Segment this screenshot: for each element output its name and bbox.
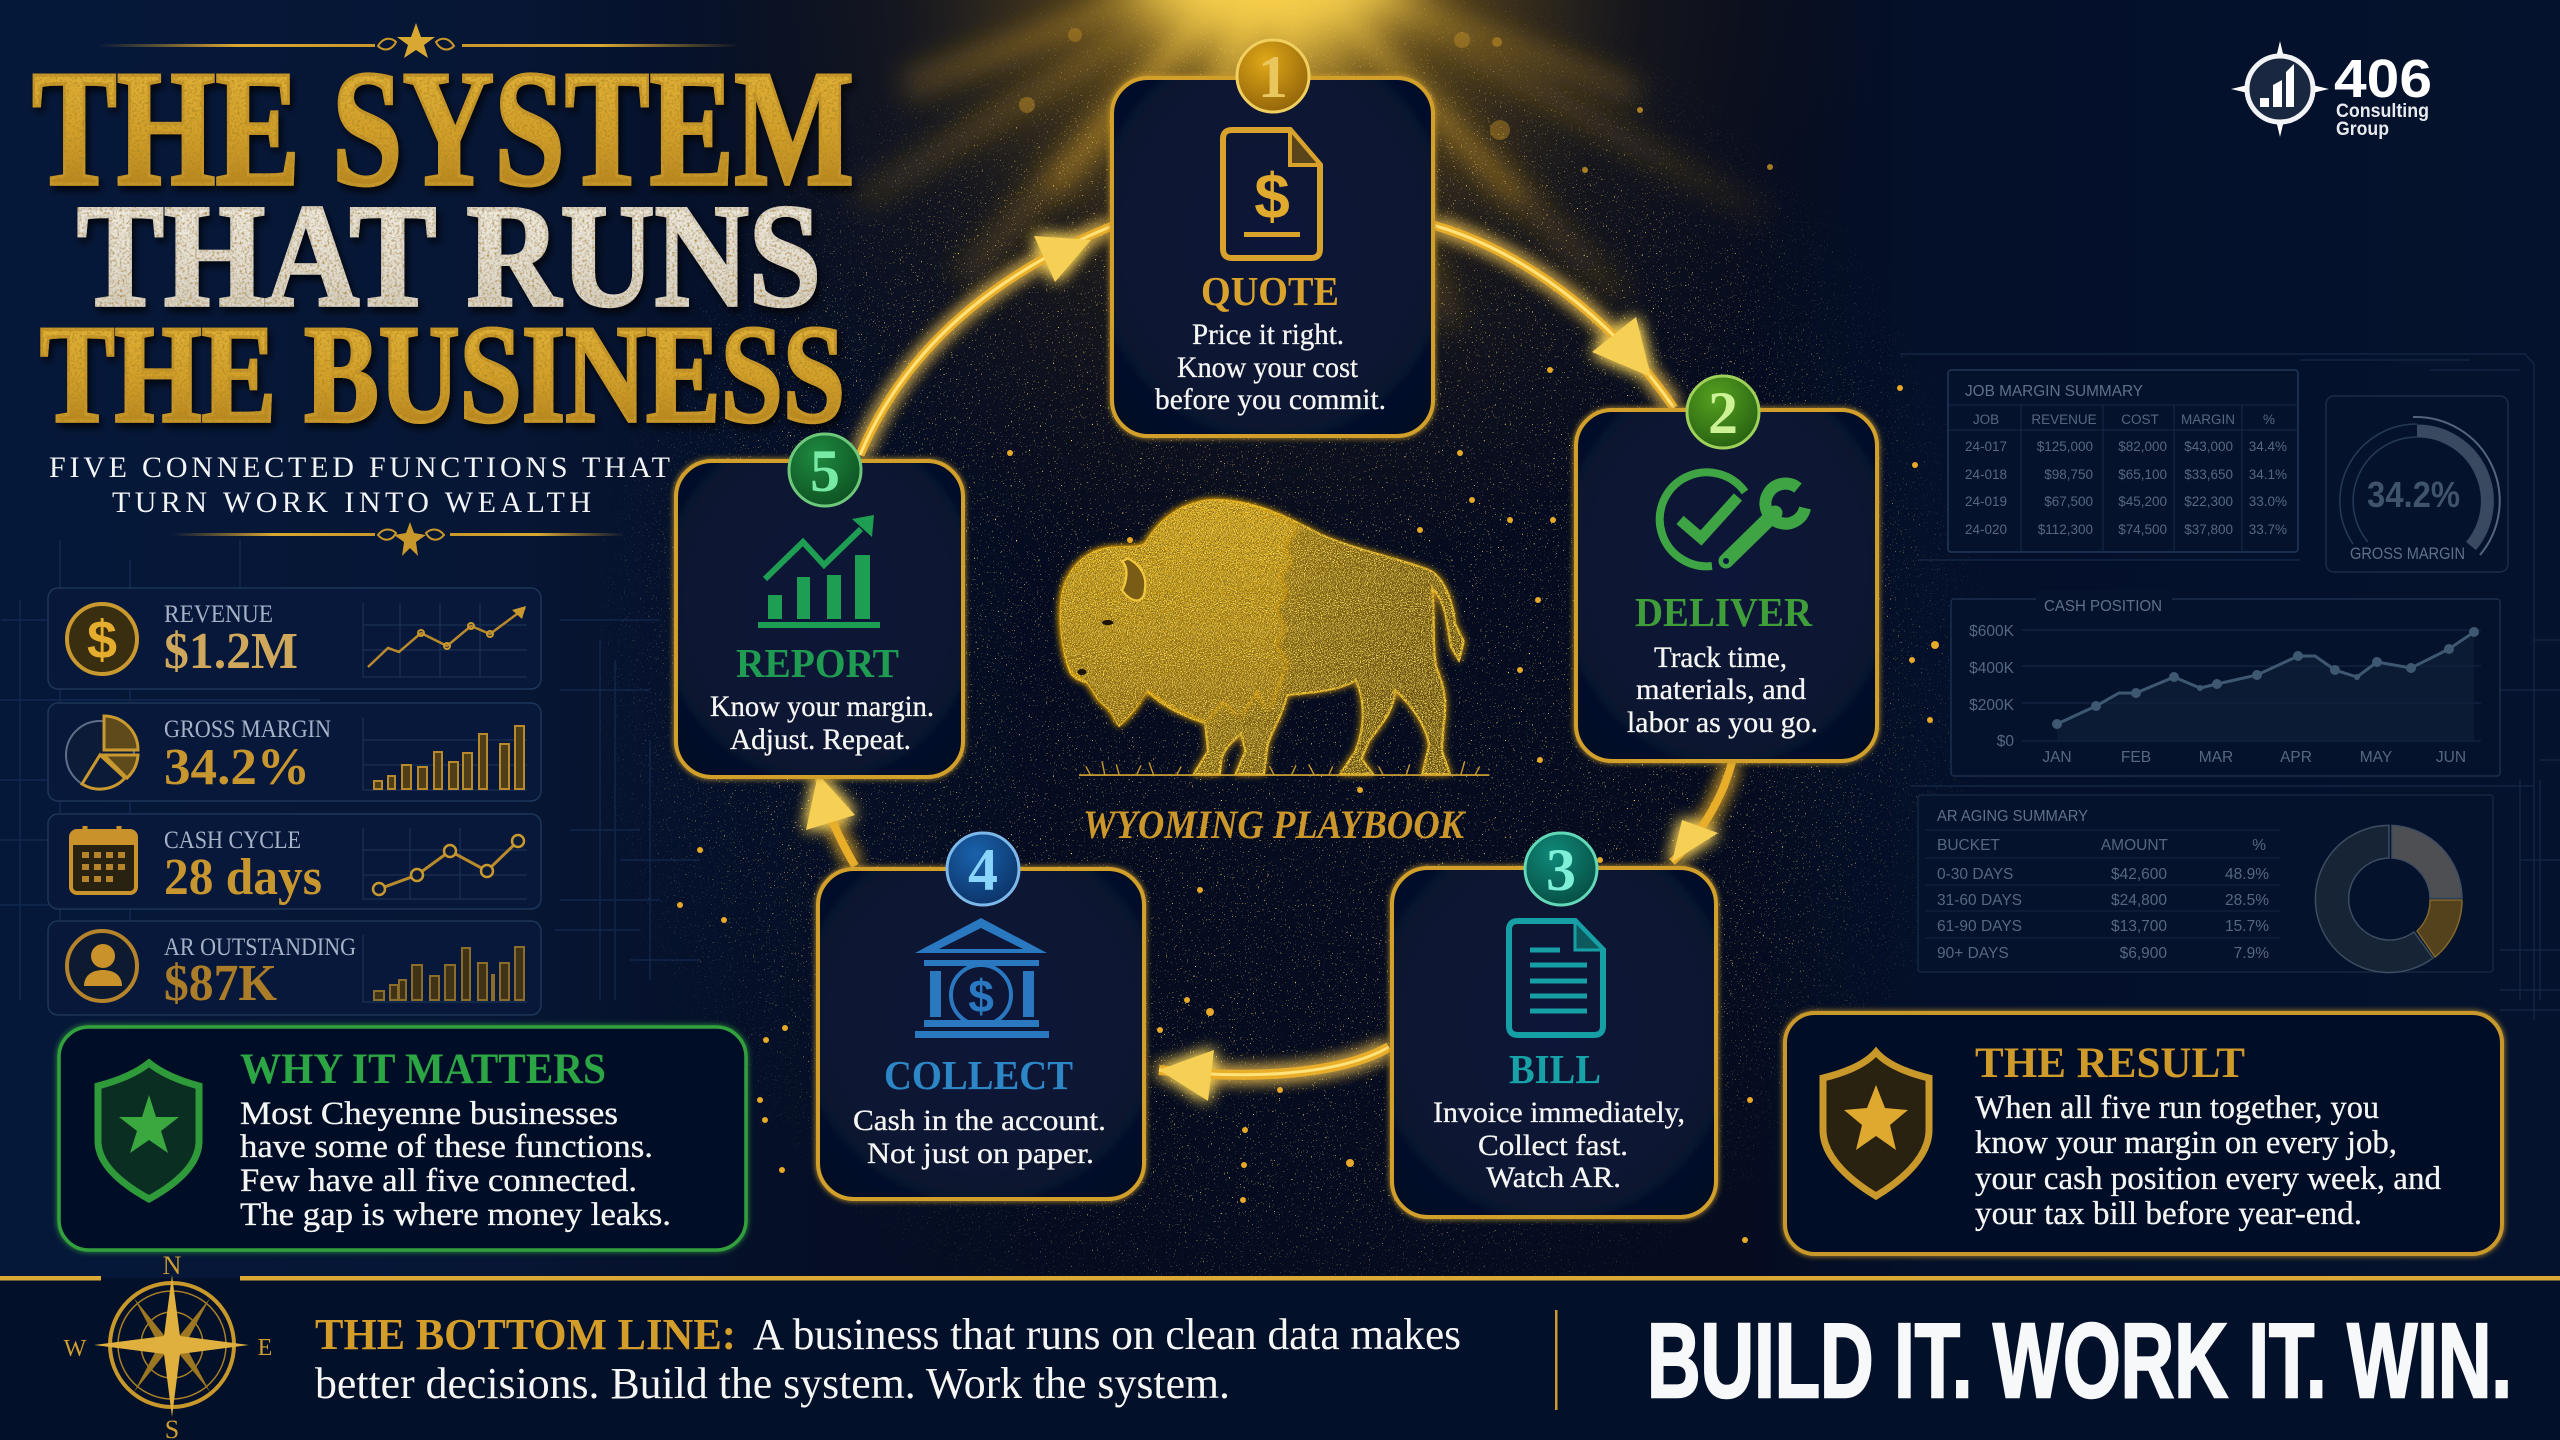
quote text: before you commit. xyxy=(1155,383,1386,416)
why it matters text: The gap is where money leaks. xyxy=(240,1197,671,1233)
dashboard: cash position chart: JUN xyxy=(2436,749,2466,766)
dashboard: AR aging table: 7.9% xyxy=(2234,945,2269,962)
ornament: top divider xyxy=(98,23,740,58)
bill text: Invoice immediately, xyxy=(1433,1096,1685,1129)
icon: invoice document xyxy=(1509,921,1603,1035)
dashboard: job margin table: $74,500 xyxy=(2118,522,2167,537)
dashboard: job margin table: 24-018 xyxy=(1965,467,2007,482)
dashboard: job margin table: REVENUE xyxy=(2031,412,2097,427)
quote text: Price it right. xyxy=(1192,318,1344,351)
title: THE SYSTEM xyxy=(32,36,854,220)
panel: why it matters: WHY IT MATTERS xyxy=(240,1046,606,1093)
dashboard: AR aging table: % xyxy=(2252,837,2266,854)
icon: compass: E xyxy=(258,1335,272,1361)
dashboard: job margin table: $43,000 xyxy=(2184,439,2233,454)
result text: your cash position every week, and xyxy=(1975,1161,2441,1197)
deliver text xyxy=(1627,641,1818,739)
dashboard: AR aging table: 31-60 DAYS xyxy=(1937,892,2022,909)
report text xyxy=(710,690,934,756)
panel: the result: THE RESULT xyxy=(1975,1040,2245,1087)
icon: check and wrench xyxy=(1660,472,1805,566)
icon: gold shield xyxy=(1823,1052,1929,1196)
badge: 4 xyxy=(947,833,1019,905)
dashboard: job margin table: % xyxy=(2263,412,2275,427)
wyoming playbook label: WYOMING PLAYBOOK xyxy=(1083,802,1466,847)
dashboard: job margin table: 24-019 xyxy=(1965,494,2007,509)
dashboard: AR aging table: $13,700 xyxy=(2111,918,2167,935)
dashboard: job margin table: $37,800 xyxy=(2184,522,2233,537)
deliver text: labor as you go. xyxy=(1627,706,1818,739)
dashboard: AR aging table: 90+ DAYS xyxy=(1937,945,2009,962)
dashboard: job margin table: $112,300 xyxy=(2038,522,2093,537)
arrow: quote to deliver xyxy=(1433,225,1674,408)
dashboard: gross margin gauge: 34.2% xyxy=(2367,474,2460,515)
dashboard: job margin table: $82,000 xyxy=(2118,439,2167,454)
deliver text: Track time, xyxy=(1654,641,1787,674)
blueprint lines: left xyxy=(0,540,700,1000)
dashboard: cash position chart: FEB xyxy=(2121,749,2151,766)
dashboard: job margin table: 34.4% xyxy=(2249,439,2287,454)
KPI panel: gross margin: 34.2% xyxy=(164,739,310,796)
dashboard: AR aging table: $6,900 xyxy=(2120,945,2167,962)
dashboard: AR aging table: BUCKET xyxy=(1937,837,2000,854)
icon: quote document: $ xyxy=(1254,160,1290,232)
dashboard: cash position chart: $200K xyxy=(1969,697,2015,714)
KPI panel: revenue: $1.2M xyxy=(164,623,298,680)
card: collect xyxy=(818,869,1144,1199)
dashboard: job margin table: COST xyxy=(2121,412,2159,427)
dashboard: job margin table: JOB MARGIN SUMMARY xyxy=(1965,383,2143,400)
dashboard: cash position chart: $400K xyxy=(1969,660,2015,677)
subtitle: TURN WORK INTO WEALTH xyxy=(112,486,591,519)
badge: 2 xyxy=(1687,376,1759,448)
logo: 406 Consulting Group: Consulting xyxy=(2336,101,2429,122)
why it matters text: Few have all five connected. xyxy=(240,1163,637,1199)
card: deliver xyxy=(1576,410,1877,761)
badge: 4: 4 xyxy=(968,837,998,903)
dashboard: AR aging table: AR AGING SUMMARY xyxy=(1937,808,2088,825)
dashboard: job margin table: 33.0% xyxy=(2249,494,2287,509)
dashboard: job margin table: $65,100 xyxy=(2118,467,2167,482)
logo: 406 Consulting Group xyxy=(2231,41,2432,140)
dashboard: job margin table xyxy=(1948,370,2298,552)
dashboard: AR aging table: 48.9% xyxy=(2225,866,2269,883)
icon: quote document xyxy=(1223,130,1320,258)
KPI panel: AR outstanding: $87K xyxy=(164,955,278,1012)
arrow: collect to report xyxy=(806,774,855,866)
bill text: Watch AR. xyxy=(1486,1161,1621,1194)
card: report: REPORT xyxy=(736,640,899,686)
dashboard: AR aging table: 28.5% xyxy=(2225,892,2269,909)
bill text: Collect fast. xyxy=(1478,1129,1628,1162)
result text xyxy=(1975,1090,2441,1232)
title xyxy=(32,36,854,452)
deliver text: materials, and xyxy=(1636,673,1806,706)
bottom line statement: A business that runs on clean data makes xyxy=(753,1310,1461,1359)
collect text: Not just on paper. xyxy=(867,1137,1094,1170)
dashboard: job margin table: 24-020 xyxy=(1965,522,2007,537)
dashboard: AR aging table: 61-90 DAYS xyxy=(1937,918,2022,935)
dashboard: job margin table: 34.1% xyxy=(2249,467,2287,482)
dashboard: job margin table: $67,500 xyxy=(2044,494,2093,509)
badge: 3: 3 xyxy=(1546,837,1576,903)
bison xyxy=(1061,500,1489,775)
dashboard: AR donut chart xyxy=(2315,825,2462,973)
dashboard: cash position chart: CASH POSITION xyxy=(2044,598,2162,615)
golden light rays xyxy=(570,0,1970,600)
panel: why it matters xyxy=(59,1027,746,1250)
dashboard: cash position chart: MAY xyxy=(2360,749,2392,766)
icon: compass xyxy=(64,1251,272,1440)
dashboard: job margin table: JOB xyxy=(1973,412,1999,427)
result text: When all five run together, you xyxy=(1975,1090,2379,1126)
bill text xyxy=(1433,1096,1685,1194)
panel: the result xyxy=(1785,1013,2502,1254)
bottom band xyxy=(0,1276,2560,1440)
collect text: Cash in the account. xyxy=(853,1104,1106,1137)
card: deliver: DELIVER xyxy=(1635,589,1812,635)
blueprint lines: right xyxy=(1900,354,2560,1020)
badge: 2: 2 xyxy=(1708,380,1738,446)
KPI panel: AR outstanding xyxy=(48,921,541,1015)
dashboard: job margin table: MARGIN xyxy=(2181,412,2235,427)
badge: 1: 1 xyxy=(1258,44,1288,110)
dashboard: cash position chart: APR xyxy=(2280,749,2312,766)
dashboard: job margin table: $45,200 xyxy=(2118,494,2167,509)
KPI panel: cash cycle: CASH CYCLE xyxy=(164,827,301,854)
dashboard: AR aging table: 0-30 DAYS xyxy=(1937,866,2013,883)
title: THAT RUNS xyxy=(77,174,821,337)
card: report xyxy=(676,461,963,777)
icon: green shield xyxy=(98,1063,199,1199)
quote text: Know your cost xyxy=(1177,351,1359,384)
dashboard: cash position chart: $600K xyxy=(1969,623,2015,640)
report text: Know your margin. xyxy=(710,690,934,723)
badge: 5 xyxy=(789,434,861,506)
bottom line statement xyxy=(315,1310,1461,1408)
badge: 1 xyxy=(1237,40,1309,112)
card: bill xyxy=(1392,868,1716,1217)
dashboard: cash position chart xyxy=(1951,590,2500,776)
arrow: report to quote xyxy=(860,226,1112,455)
logo: 406 Consulting Group: 406 xyxy=(2334,49,2432,109)
dashboard: job margin table: $98,750 xyxy=(2044,467,2093,482)
icon: compass: N xyxy=(163,1251,182,1280)
dashboard: job margin table: $125,000 xyxy=(2037,439,2093,454)
result text: your tax bill before year-end. xyxy=(1975,1196,2362,1232)
card: collect: COLLECT xyxy=(884,1052,1073,1098)
card: quote: QUOTE xyxy=(1201,268,1339,314)
dashboard: AR aging table: $42,600 xyxy=(2111,866,2167,883)
icon: compass: W xyxy=(64,1336,87,1362)
card: bill: BILL xyxy=(1509,1046,1601,1092)
KPI panel: revenue: REVENUE xyxy=(164,601,273,628)
title: THE BUSINESS xyxy=(40,297,845,452)
card: quote xyxy=(1112,78,1433,436)
why it matters text xyxy=(240,1096,671,1233)
dashboard: AR aging table: 15.7% xyxy=(2225,918,2269,935)
dashboard: AR aging table: AMOUNT xyxy=(2101,837,2169,854)
result text: know your margin on every job, xyxy=(1975,1125,2397,1161)
KPI panel: AR outstanding: AR OUTSTANDING xyxy=(164,934,356,961)
KPI panel: gross margin: GROSS MARGIN xyxy=(164,716,331,743)
bottom line statement: better decisions. Build the system. Work the system. xyxy=(315,1359,1230,1408)
subtitle xyxy=(49,451,670,519)
dashboard: gross margin gauge: GROSS MARGIN xyxy=(2350,544,2465,563)
KPI panel: gross margin xyxy=(48,703,541,801)
why it matters text: have some of these functions. xyxy=(240,1129,653,1165)
arrow: bill to collect xyxy=(1159,1047,1389,1101)
KPI panel: cash cycle xyxy=(48,814,541,909)
dashboard: gross margin gauge xyxy=(2326,396,2508,572)
report text: Adjust. Repeat. xyxy=(730,723,911,756)
ornament: lower divider xyxy=(172,522,625,556)
dashboard: job margin table: 33.7% xyxy=(2249,522,2287,537)
dashboard: AR aging table xyxy=(1918,795,2493,972)
collect text xyxy=(853,1104,1106,1170)
dashboard: job margin table: $22,300 xyxy=(2184,494,2233,509)
dashboard: cash position chart: MAR xyxy=(2199,749,2233,766)
KPI panel: revenue: $ xyxy=(87,610,117,670)
quote text xyxy=(1155,318,1386,416)
dashboard: job margin table: $33,650 xyxy=(2184,467,2233,482)
KPI panel: cash cycle: 28 days xyxy=(164,849,322,906)
dashboard: cash position chart: JAN xyxy=(2042,749,2072,766)
subtitle: FIVE CONNECTED FUNCTIONS THAT xyxy=(49,451,670,484)
icon: bank: $ xyxy=(968,970,994,1022)
icon: bank xyxy=(915,918,1049,1038)
dashboard: AR aging table: $24,800 xyxy=(2111,892,2167,909)
arrow: deliver to bill xyxy=(1672,762,1732,862)
gold dust particles xyxy=(600,0,2000,1300)
KPI panel: revenue xyxy=(48,588,541,689)
dashboard: cash position chart: $0 xyxy=(1997,733,2014,750)
why it matters text: Most Cheyenne businesses xyxy=(240,1096,618,1132)
dashboard: job margin table: 24-017 xyxy=(1965,439,2007,454)
icon: growth chart xyxy=(758,515,880,628)
badge: 3 xyxy=(1525,833,1597,905)
bottom line statement: THE BOTTOM LINE: xyxy=(315,1310,736,1359)
logo: 406 Consulting Group: Group xyxy=(2336,119,2389,140)
badge: 5: 5 xyxy=(810,438,840,504)
